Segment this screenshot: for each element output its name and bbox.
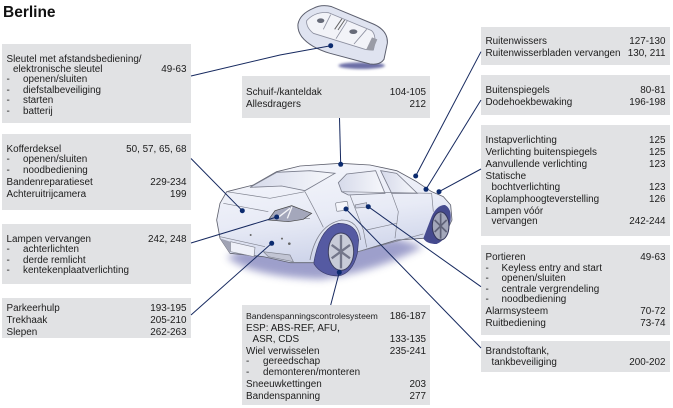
- panel: tyres: demonteren/monteren: [263, 367, 360, 378]
- panel: doors: Alarmsysteem: [486, 306, 548, 317]
- panel: wipers: [481, 27, 670, 65]
- panel: key: diefstalbeveiliging: [23, 85, 101, 96]
- panel: doors: -: [486, 294, 489, 305]
- panel: tyres: 235-241: [390, 346, 426, 357]
- panel: doors: [481, 245, 670, 335]
- panel: mirrors: 80-81: [640, 85, 666, 96]
- panel: lighting: 125: [649, 147, 666, 158]
- panel: tyres: gereedschap: [263, 356, 321, 367]
- panel: doors: noodbediening: [502, 294, 566, 305]
- panel: sunroof: [242, 76, 430, 118]
- panel: trunk lid: noodbediening: [23, 165, 88, 176]
- panel: parking: Parkeerhulp: [6, 303, 60, 314]
- panel: lighting: Koplamphoogteverstelling: [486, 194, 599, 205]
- panel: key: batterij: [23, 106, 53, 117]
- panel: tyres: Wiel verwisselen: [246, 346, 320, 357]
- panel: lighting: Lampen vóór: [486, 206, 544, 217]
- panel: lighting: 126: [649, 194, 666, 205]
- panel: tyres: 186-187: [390, 311, 426, 322]
- panel: key: elektronische sleutel: [13, 64, 102, 75]
- panel: trunk lid: 50, 57, 65, 68: [126, 144, 187, 155]
- panel: wipers: 127-130: [629, 36, 666, 47]
- panel: parking: [2, 298, 191, 338]
- panel: key: -: [6, 74, 10, 85]
- panel: tyres: 203: [410, 379, 426, 390]
- panel: tyres: 277: [410, 391, 426, 402]
- panel: trunk lid: openen/sluiten: [23, 154, 87, 165]
- panel: trunk lid: 229-234: [150, 177, 187, 188]
- panel: lighting: 123: [649, 159, 666, 170]
- panel: doors: -: [486, 263, 489, 274]
- panel: doors: 70-72: [640, 306, 666, 317]
- panel: tyres: [242, 305, 430, 405]
- panel: rear lamps: -: [6, 255, 10, 266]
- panel: rear lamps: [2, 224, 191, 284]
- panel: fuel tank: [481, 341, 670, 372]
- panel: sunroof: 104-105: [390, 87, 426, 98]
- panel: sunroof: Allesdragers: [246, 99, 301, 110]
- panel: rear lamps: -: [6, 265, 10, 276]
- panel: doors: openen/sluiten: [502, 273, 566, 284]
- panel: trunk lid: Achteruitrijcamera: [6, 189, 87, 200]
- panel: trunk lid: -: [6, 165, 10, 176]
- panel: parking: Slepen: [6, 327, 37, 338]
- panel: lighting: Instapverlichting: [486, 135, 557, 146]
- panel: lighting: bochtverlichting: [492, 182, 560, 193]
- panel: lighting: 125: [649, 135, 666, 146]
- panel: parking: 193-195: [150, 303, 187, 314]
- panel: rear lamps: Lampen vervangen: [6, 234, 91, 245]
- panel: tyres: -: [246, 367, 249, 378]
- panel: lighting: [481, 125, 670, 236]
- panel: mirrors: 196-198: [629, 97, 666, 108]
- panel: key: -: [6, 95, 10, 106]
- panel: tyres: Bandenspanning: [246, 391, 320, 402]
- panel: trunk lid: [2, 134, 191, 210]
- panel: rear lamps: 242, 248: [148, 234, 187, 245]
- panel: tyres: 133-135: [390, 334, 426, 345]
- panel: lighting: Verlichting buitenspiegels: [486, 147, 597, 158]
- panel: parking: Trekhaak: [6, 315, 47, 326]
- panel: key: [2, 44, 191, 123]
- panel: wipers: Ruitenwissers: [486, 36, 547, 47]
- panel: doors: 49-63: [640, 252, 666, 263]
- panel: doors: -: [486, 273, 489, 284]
- panel: trunk lid: Kofferdeksel: [6, 144, 61, 155]
- leader lines: [191, 46, 481, 348]
- panel: sunroof: Schuif-/kanteldak: [246, 87, 322, 98]
- panel: fuel tank: Brandstoftank,: [486, 346, 549, 357]
- panel: fuel tank: tankbeveiliging: [492, 357, 557, 368]
- panel: key: Sleutel met afstandsbediening/: [6, 54, 142, 65]
- icon: front wheel: [423, 205, 451, 244]
- panel: rear lamps: kentekenplaatverlichting: [23, 265, 129, 276]
- panel: key: starten: [23, 95, 53, 106]
- panel: doors: -: [486, 284, 489, 295]
- panel: key: 49-63: [161, 64, 187, 75]
- panel: trunk lid: 199: [170, 189, 187, 200]
- panel: tyres: Sneeuwkettingen: [246, 379, 322, 390]
- panel: key: -: [6, 85, 10, 96]
- panel: lighting: vervangen: [492, 216, 538, 227]
- icon: rear wheel: [310, 220, 361, 276]
- panel: mirrors: [481, 75, 670, 115]
- panel: doors: 73-74: [640, 318, 666, 329]
- panel: doors: Ruitbediening: [486, 318, 546, 329]
- panel: wipers: 130, 211: [628, 48, 666, 59]
- panel: fuel tank: 200-202: [629, 357, 666, 368]
- callout dots: [240, 43, 442, 275]
- panel: lighting: Statische: [486, 171, 527, 182]
- panel: key: openen/sluiten: [23, 74, 87, 85]
- panel: key: -: [6, 106, 10, 117]
- panel: trunk lid: Bandenreparatieset: [6, 177, 93, 188]
- panel: doors: centrale vergrendeling: [502, 284, 599, 295]
- panel: wipers: Ruitenwisserbladen vervangen: [486, 48, 621, 59]
- panel: tyres: -: [246, 356, 249, 367]
- panel: doors: Keyless entry and start: [502, 263, 602, 274]
- panel: tyres: Bandenspanningscontrolesysteem: [246, 311, 378, 321]
- panel: mirrors: Dodehoekbewaking: [486, 97, 572, 108]
- panel: mirrors: Buitenspiegels: [486, 85, 550, 96]
- panel: rear lamps: achterlichten: [23, 244, 79, 255]
- title: Berline: [3, 4, 56, 21]
- icon: key fob: [298, 6, 387, 69]
- panel: tyres: ESP: ABS-REF, AFU,: [246, 323, 340, 334]
- panel: parking: 262-263: [150, 327, 187, 338]
- panel: tyres: ASR, CDS: [252, 334, 300, 345]
- panel: rear lamps: derde remlicht: [23, 255, 86, 266]
- panel: lighting: 123: [649, 182, 666, 193]
- panel: doors: Portieren: [486, 252, 526, 263]
- illustration: car: [217, 163, 452, 279]
- panel: sunroof: 212: [410, 99, 426, 110]
- panel: lighting: 242-244: [629, 216, 666, 227]
- panel: parking: 205-210: [150, 315, 187, 326]
- panel: trunk lid: -: [6, 154, 10, 165]
- panel: lighting: Aanvullende verlichting: [486, 159, 587, 170]
- panel: rear lamps: -: [6, 244, 10, 255]
